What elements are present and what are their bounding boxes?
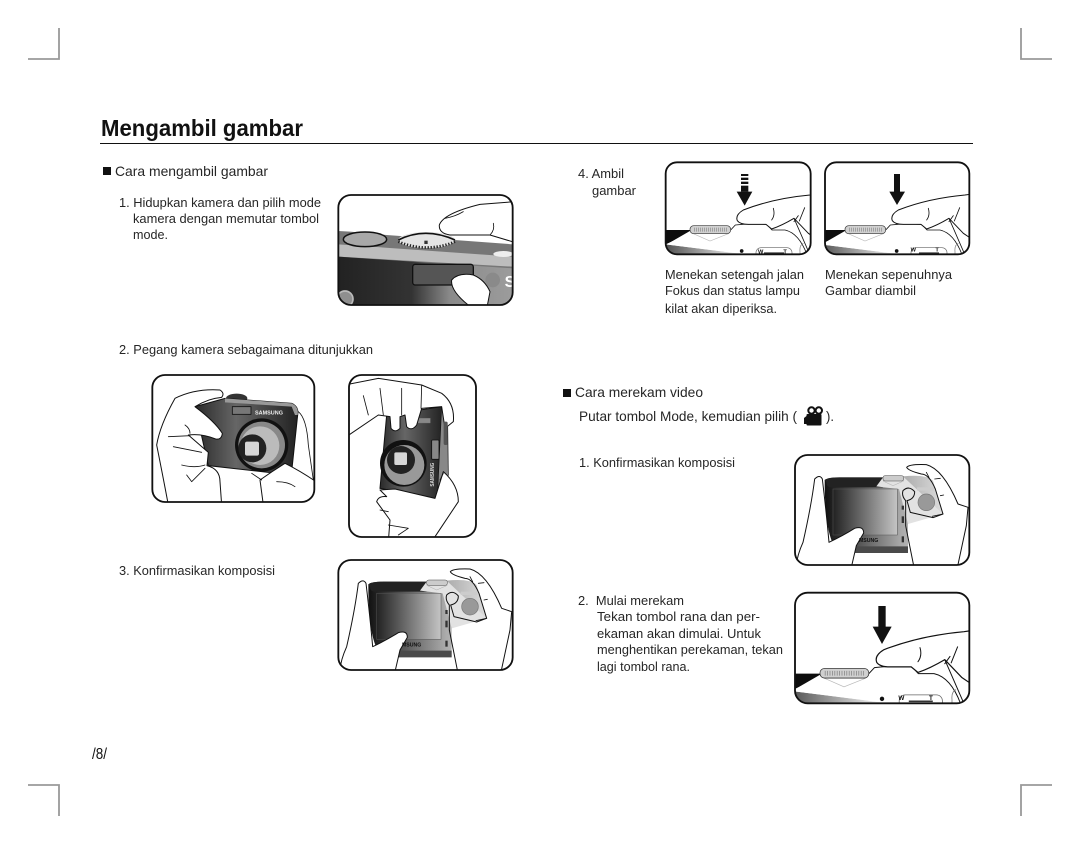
panel: video composition: MSUNG <box>859 538 878 544</box>
step 4 text <box>578 167 636 198</box>
panel: full press <box>824 161 970 256</box>
step 1 text <box>119 196 321 242</box>
video step 2 text: lagi tombol rana. <box>597 660 690 674</box>
panel: portrait grip <box>345 375 476 542</box>
icon: dashed arrow <box>737 174 752 206</box>
step 4 text: 4. Ambil <box>578 167 624 181</box>
panel: landscape grip <box>152 375 318 505</box>
half-press caption: kilat akan diperiksa. <box>665 302 777 316</box>
step 1 text: mode. <box>133 228 168 242</box>
panel: landscape grip: SAMSUNG <box>255 411 284 417</box>
title: Mengambil gambar <box>101 115 303 141</box>
step 1 text: 1. Hidupkan kamera dan pilih mode <box>119 196 321 210</box>
icon: video camera <box>804 407 822 426</box>
full-press caption: Gambar diambil <box>825 284 916 298</box>
full-press caption <box>825 268 952 298</box>
half-press caption <box>665 268 804 316</box>
panel: video composition <box>785 455 969 572</box>
title rule <box>100 143 973 144</box>
panel: mode dial illustration: S <box>505 274 516 291</box>
panel: composition check: MSUNG <box>402 643 421 649</box>
panel: mode dial illustration <box>337 195 523 309</box>
panel: start recording press <box>794 592 970 704</box>
heading: Cara merekam video: Cara merekam video <box>575 384 703 400</box>
step 4 text: gambar <box>592 184 636 198</box>
panel: half press: W <box>758 250 764 256</box>
panel: half press <box>664 161 812 256</box>
video step 2 text <box>578 594 783 674</box>
panel: half press: T <box>783 250 787 256</box>
full-press caption: Menekan sepenuhnya <box>825 268 952 282</box>
icon: solid arrow <box>873 606 892 644</box>
step 2 text: 2. Pegang kamera sebagaimana ditunjukkan <box>119 343 373 357</box>
video step 2 text: Tekan tombol rana dan per- <box>597 610 760 624</box>
step 1 text: kamera dengan memutar tombol <box>133 212 319 226</box>
video step 2 text: menghentikan perekaman, tekan <box>597 643 783 657</box>
heading: Cara mengambil gambar: Cara mengambil gambar <box>115 163 268 179</box>
video mode instruction: ). <box>826 408 834 424</box>
half-press caption: Menekan setengah jalan <box>665 268 804 282</box>
panel: portrait grip: SAMSUNG <box>430 462 436 487</box>
video step 2 text: ekaman akan dimulai. Untuk <box>597 627 762 641</box>
panel: composition check <box>328 560 513 677</box>
step 3 text: 3. Konfirmasikan komposisi <box>119 564 275 578</box>
panel: full press: W <box>911 248 917 254</box>
panel: start recording press: W <box>898 695 904 702</box>
icon: solid arrow <box>889 174 905 205</box>
video mode instruction: Putar tombol Mode, kemudian pilih ( <box>579 408 797 424</box>
half-press caption: Fokus dan status lampu <box>665 284 800 298</box>
video step 2 text: 2. Mulai merekam <box>578 594 684 608</box>
panel: start recording press: T <box>929 695 933 702</box>
panel: full press: T <box>935 248 939 254</box>
page number: /8/ <box>92 746 107 763</box>
video step 1 text: 1. Konfirmasikan komposisi <box>579 456 735 470</box>
